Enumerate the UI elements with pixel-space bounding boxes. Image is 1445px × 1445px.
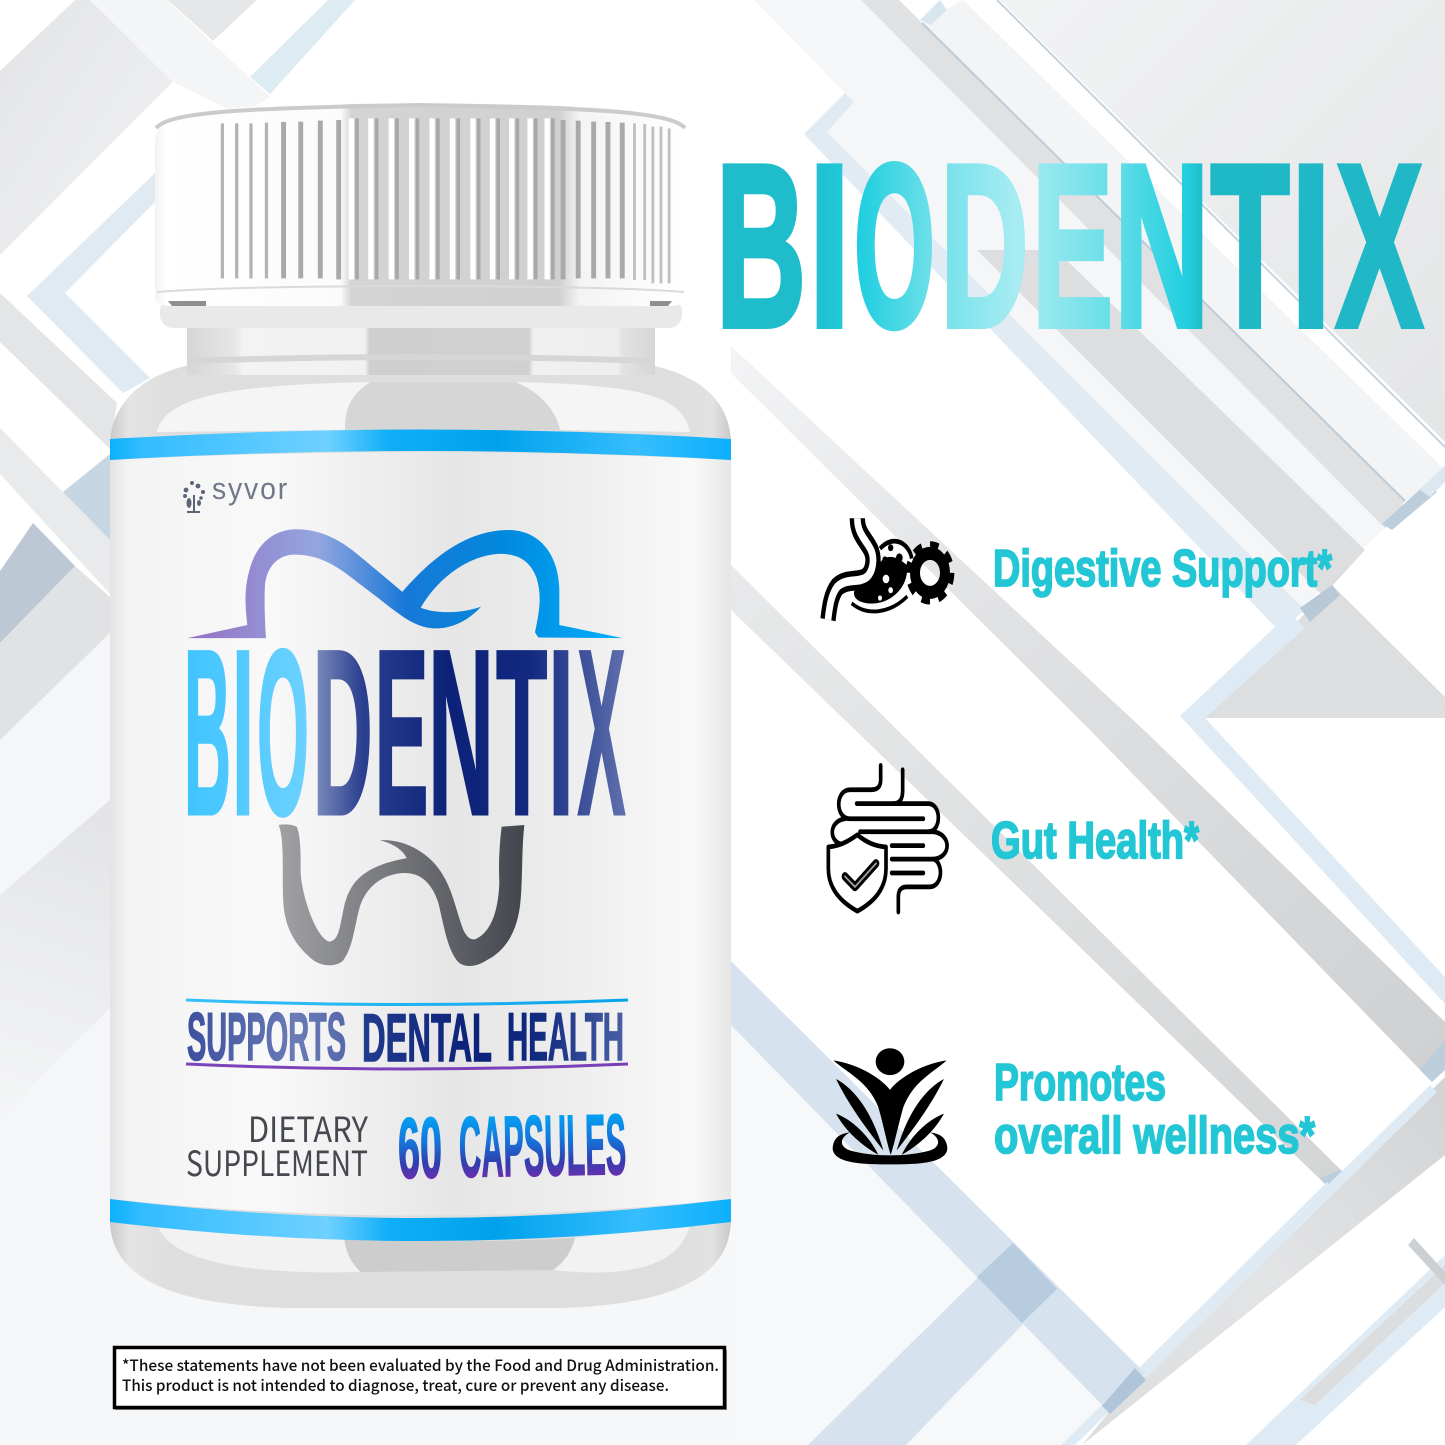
- brand: syvor logo: syvor: [212, 471, 289, 506]
- label: digestive support: Digestive Support*: [993, 540, 1333, 598]
- tooth logo: [187, 529, 623, 966]
- title: I: [1291, 117, 1331, 376]
- product bottle: [110, 104, 731, 1308]
- icon: stomach with gear: [828, 518, 952, 620]
- base highlights: [157, 1222, 690, 1273]
- icon: intestines with shield: [828, 765, 947, 912]
- title: N: [1114, 117, 1210, 376]
- dietary supplement text: [186, 1102, 368, 1187]
- label: promotes overall wellness: Promotes: [994, 1054, 1166, 1112]
- label: gut health: Gut Health*: [991, 812, 1200, 870]
- disclaimer box: [114, 1348, 727, 1410]
- icon: wellness figure: [833, 1048, 947, 1164]
- disclaimer box: *These statements have not been evaluated by the Food and Drug Administration.: [122, 1354, 719, 1376]
- dietary supplement text: SUPPLEMENT: [186, 1136, 368, 1187]
- dietary supplement text: DIETARY: [248, 1102, 368, 1153]
- label: promotes overall wellness: overall wellness*: [994, 1107, 1316, 1165]
- benefit 1: digestive support: [828, 518, 1333, 620]
- bottle cap: [155, 104, 686, 306]
- title: I: [808, 117, 850, 376]
- bottle body: [110, 364, 731, 1308]
- label tagline: DENTAL: [362, 1000, 492, 1076]
- label tagline: SUPPORTS: [187, 999, 346, 1075]
- title: O: [854, 117, 935, 376]
- label product name: E: [374, 601, 428, 865]
- label panel: [110, 452, 731, 1216]
- label product name: I: [232, 601, 254, 865]
- bottle neck: [160, 298, 682, 375]
- cap ridges: [222, 118, 669, 283]
- benefit 3: overall wellness: [833, 1048, 1316, 1165]
- shoulder highlights: [157, 382, 690, 432]
- disclaimer box: This product is not intended to diagnose, treat, cure or prevent any disease.: [122, 1374, 669, 1396]
- capsule count: 60: [397, 1100, 443, 1197]
- product bottle: CAPSULES: [458, 1097, 627, 1196]
- label product name: T: [496, 601, 547, 865]
- product bottle: HEALTH: [507, 999, 624, 1075]
- label product name: D: [313, 601, 373, 865]
- label product name: B: [184, 601, 231, 865]
- product bottle: X: [578, 601, 626, 865]
- label top blue band: [110, 430, 731, 460]
- title: E: [1032, 117, 1113, 376]
- label: promotes overall wellness: [994, 1054, 1316, 1165]
- tooth roots: [279, 824, 524, 966]
- benefit 2: gut health: [828, 765, 1200, 912]
- label product name: N: [428, 601, 494, 865]
- label product name: O: [257, 601, 309, 865]
- title: B: [716, 117, 806, 376]
- brand: syvor logo: [183, 471, 289, 513]
- title: T: [1211, 117, 1290, 376]
- tooth crown: [187, 529, 623, 638]
- label bottom blue band: [110, 1199, 731, 1241]
- title: D: [940, 117, 1028, 376]
- capsule count: [397, 1097, 627, 1197]
- label product name: I: [548, 601, 574, 865]
